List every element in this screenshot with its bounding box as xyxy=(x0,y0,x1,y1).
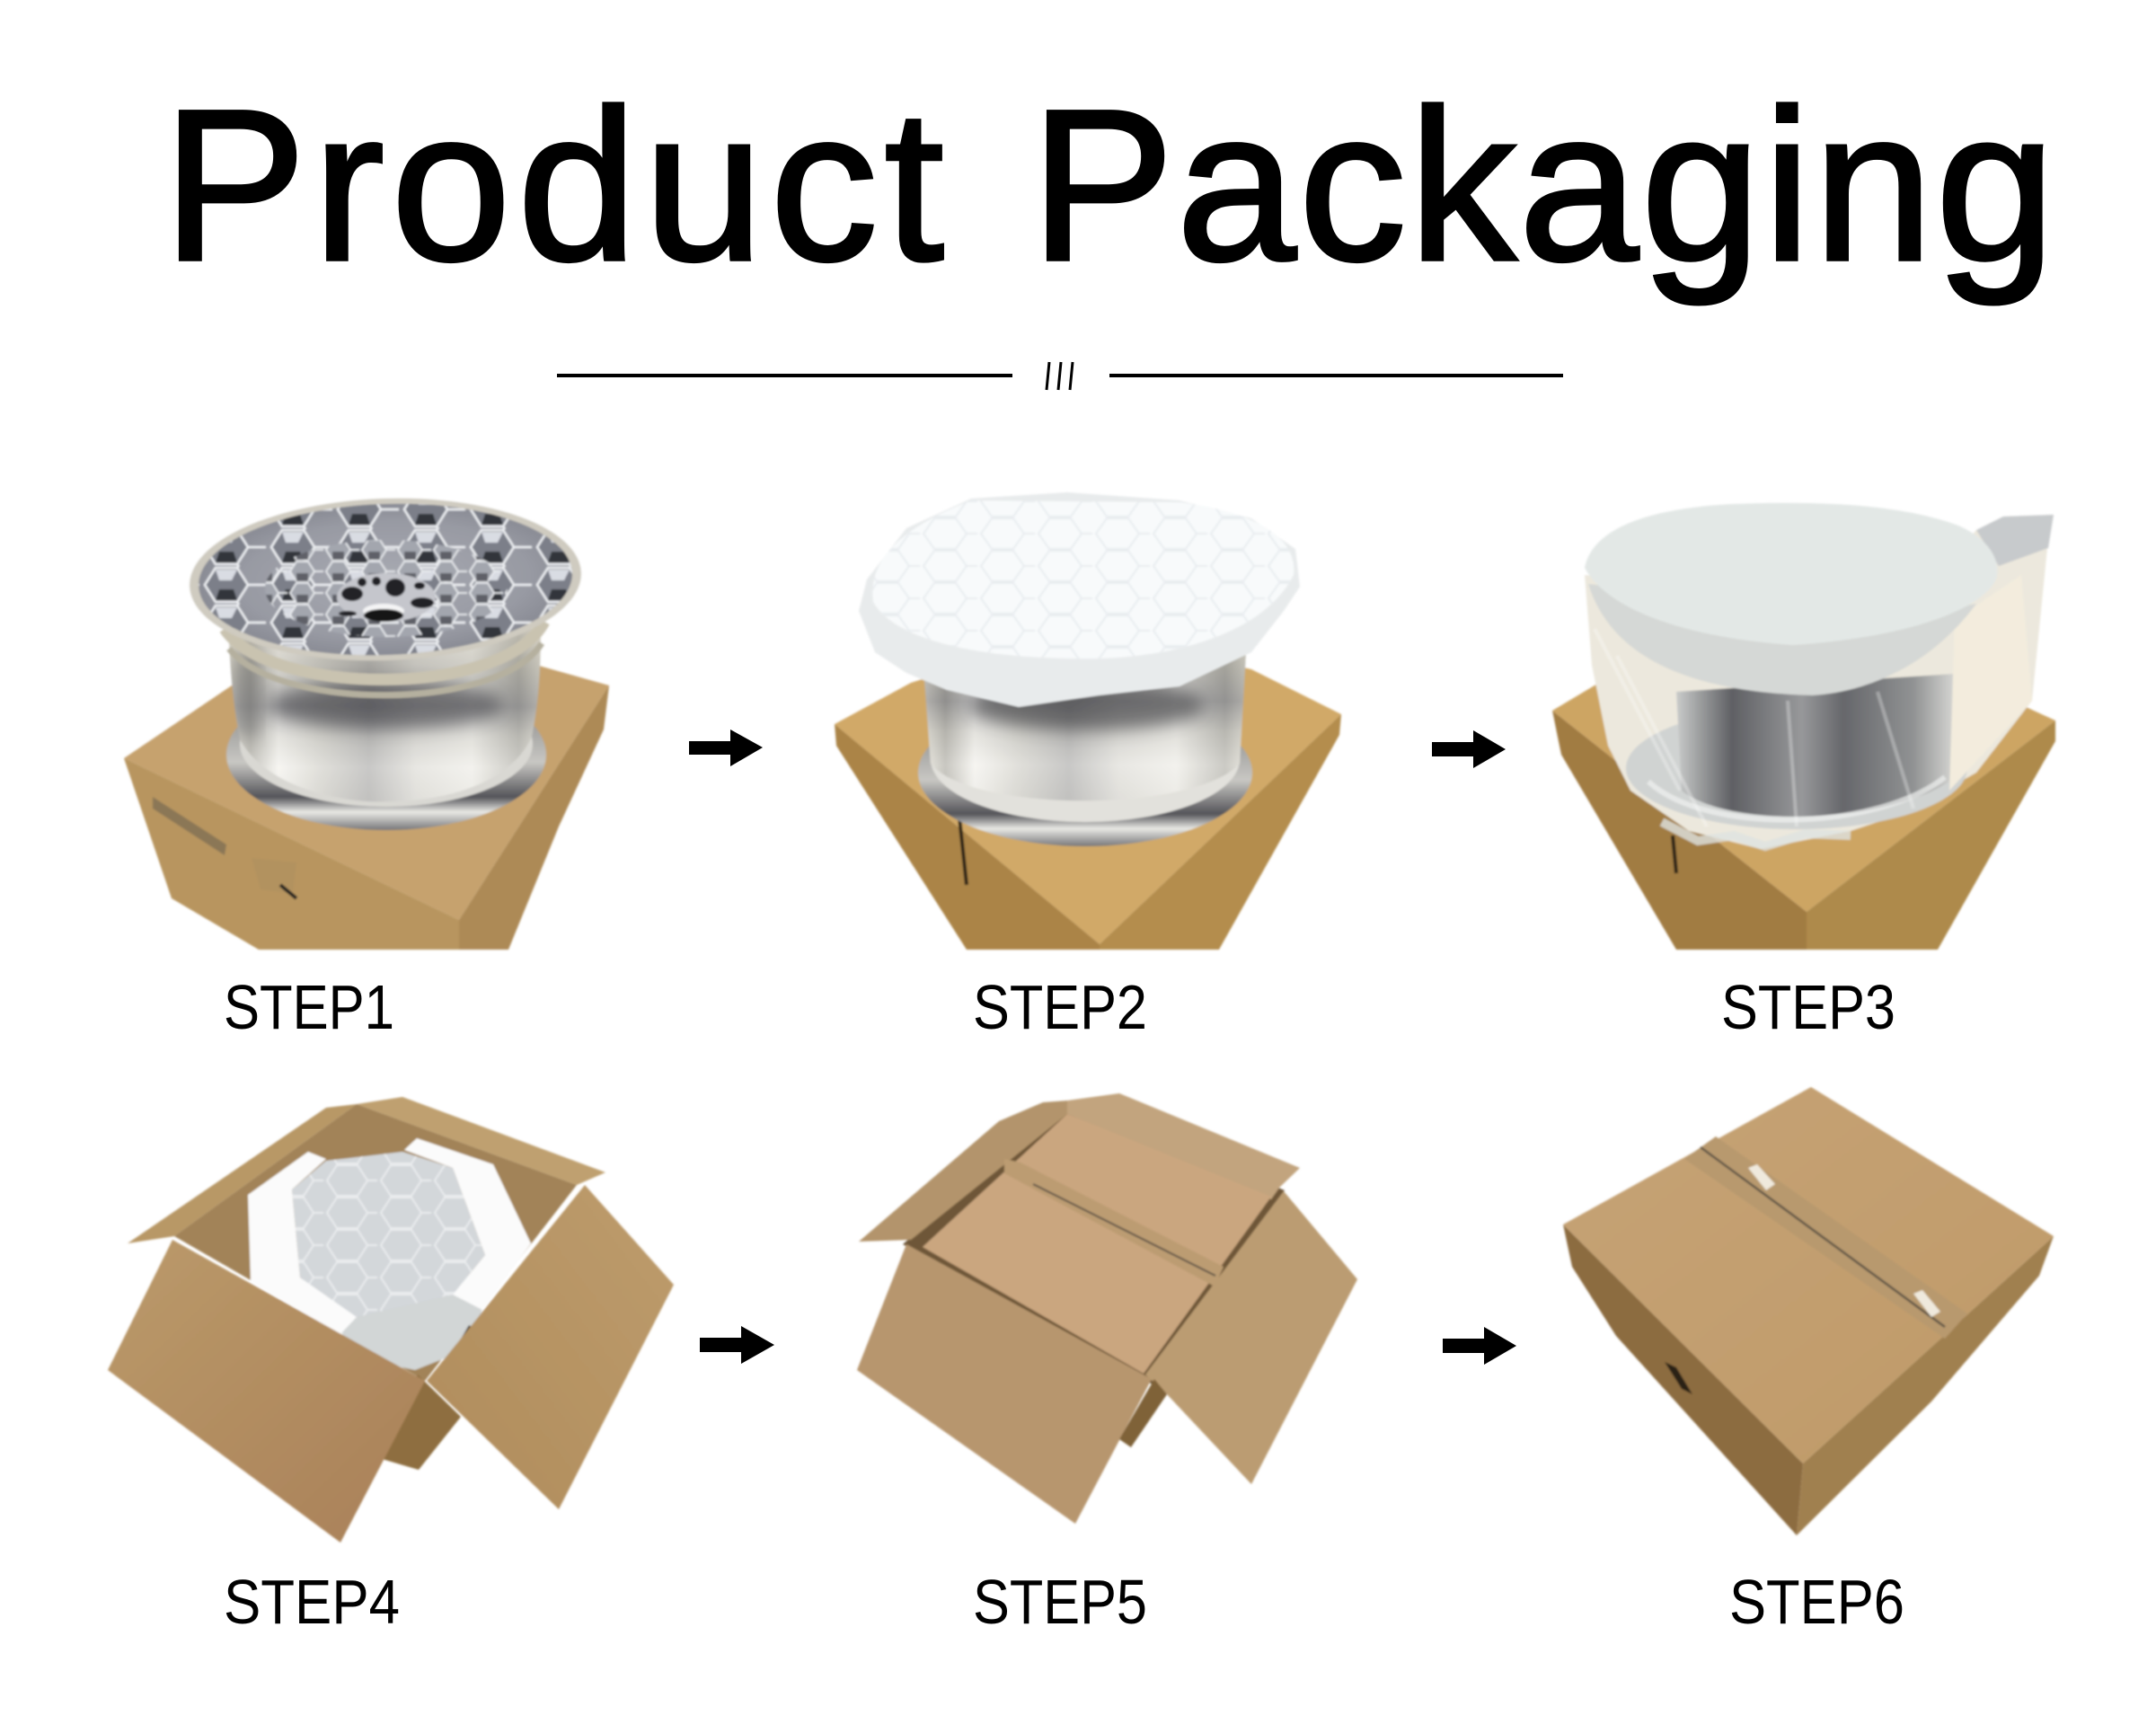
box left face: step 6 xyxy=(1563,1225,1803,1535)
panel: step 3 wheel in plastic xyxy=(1552,503,2055,950)
box side: step 5 xyxy=(1119,1379,1167,1447)
plastic bag: step 3 xyxy=(1585,515,2054,849)
panel: step 1 wheel on box xyxy=(124,491,609,950)
box: step 2 xyxy=(835,629,1341,950)
label: step 2: STEP2 xyxy=(973,972,1147,1042)
box interior: step 5 xyxy=(903,1101,1285,1388)
hand hole: step 6 xyxy=(1665,1362,1692,1394)
flap: back right step 5 xyxy=(1067,1093,1300,1199)
arrow: step 2 to 3 xyxy=(1432,730,1506,768)
tape: step 6 xyxy=(1684,1136,1967,1339)
panel: step 4 open box with foam xyxy=(108,1097,674,1543)
box interior: step 4 xyxy=(174,1104,577,1381)
flap: back right step 4 xyxy=(357,1097,605,1185)
label: step 3: STEP3 xyxy=(1721,972,1895,1042)
flap: back left step 5 xyxy=(859,1101,1067,1242)
label: step 4: STEP4 xyxy=(224,1567,400,1637)
flap: back left step 4 xyxy=(128,1104,357,1243)
title: Product xyxy=(163,65,944,305)
box: step 3 xyxy=(1552,683,2055,950)
label: step 5: STEP5 xyxy=(973,1567,1147,1637)
arrow: step 4 to 5 xyxy=(700,1326,774,1364)
wheel barrel: step 2 xyxy=(916,654,1254,847)
cloth cover: step 2 xyxy=(859,492,1300,707)
cloth cap: step 3 xyxy=(1585,503,1997,695)
wheel: step 1 xyxy=(187,491,584,830)
flap: front right step 4 xyxy=(427,1185,674,1509)
title: Packaging xyxy=(1030,65,2055,305)
inner board: step 5 xyxy=(923,1114,1271,1374)
box side: step 4 xyxy=(373,1375,461,1470)
panel: step 6 closed box xyxy=(1563,1087,2054,1535)
label: step 1: STEP1 xyxy=(224,972,394,1042)
panel: step 5 open box with lid xyxy=(857,1093,1357,1524)
box: step 1 xyxy=(124,647,609,950)
title xyxy=(163,65,2055,305)
flap: front left step 5 xyxy=(857,1244,1152,1524)
foam and wheel: step 4 xyxy=(248,1138,531,1375)
panel: step 2 wheel with cloth xyxy=(835,492,1341,950)
flap: front left step 4 xyxy=(108,1240,425,1543)
box right face: step 6 xyxy=(1797,1236,2054,1535)
flap: front right step 5 xyxy=(1145,1191,1357,1484)
divider xyxy=(557,362,1563,390)
arrow: step 5 to 6 xyxy=(1443,1327,1516,1365)
arrow: step 1 to 2 xyxy=(689,729,763,766)
label: step 6: STEP6 xyxy=(1729,1567,1904,1637)
box top: step 6 xyxy=(1563,1087,2054,1463)
